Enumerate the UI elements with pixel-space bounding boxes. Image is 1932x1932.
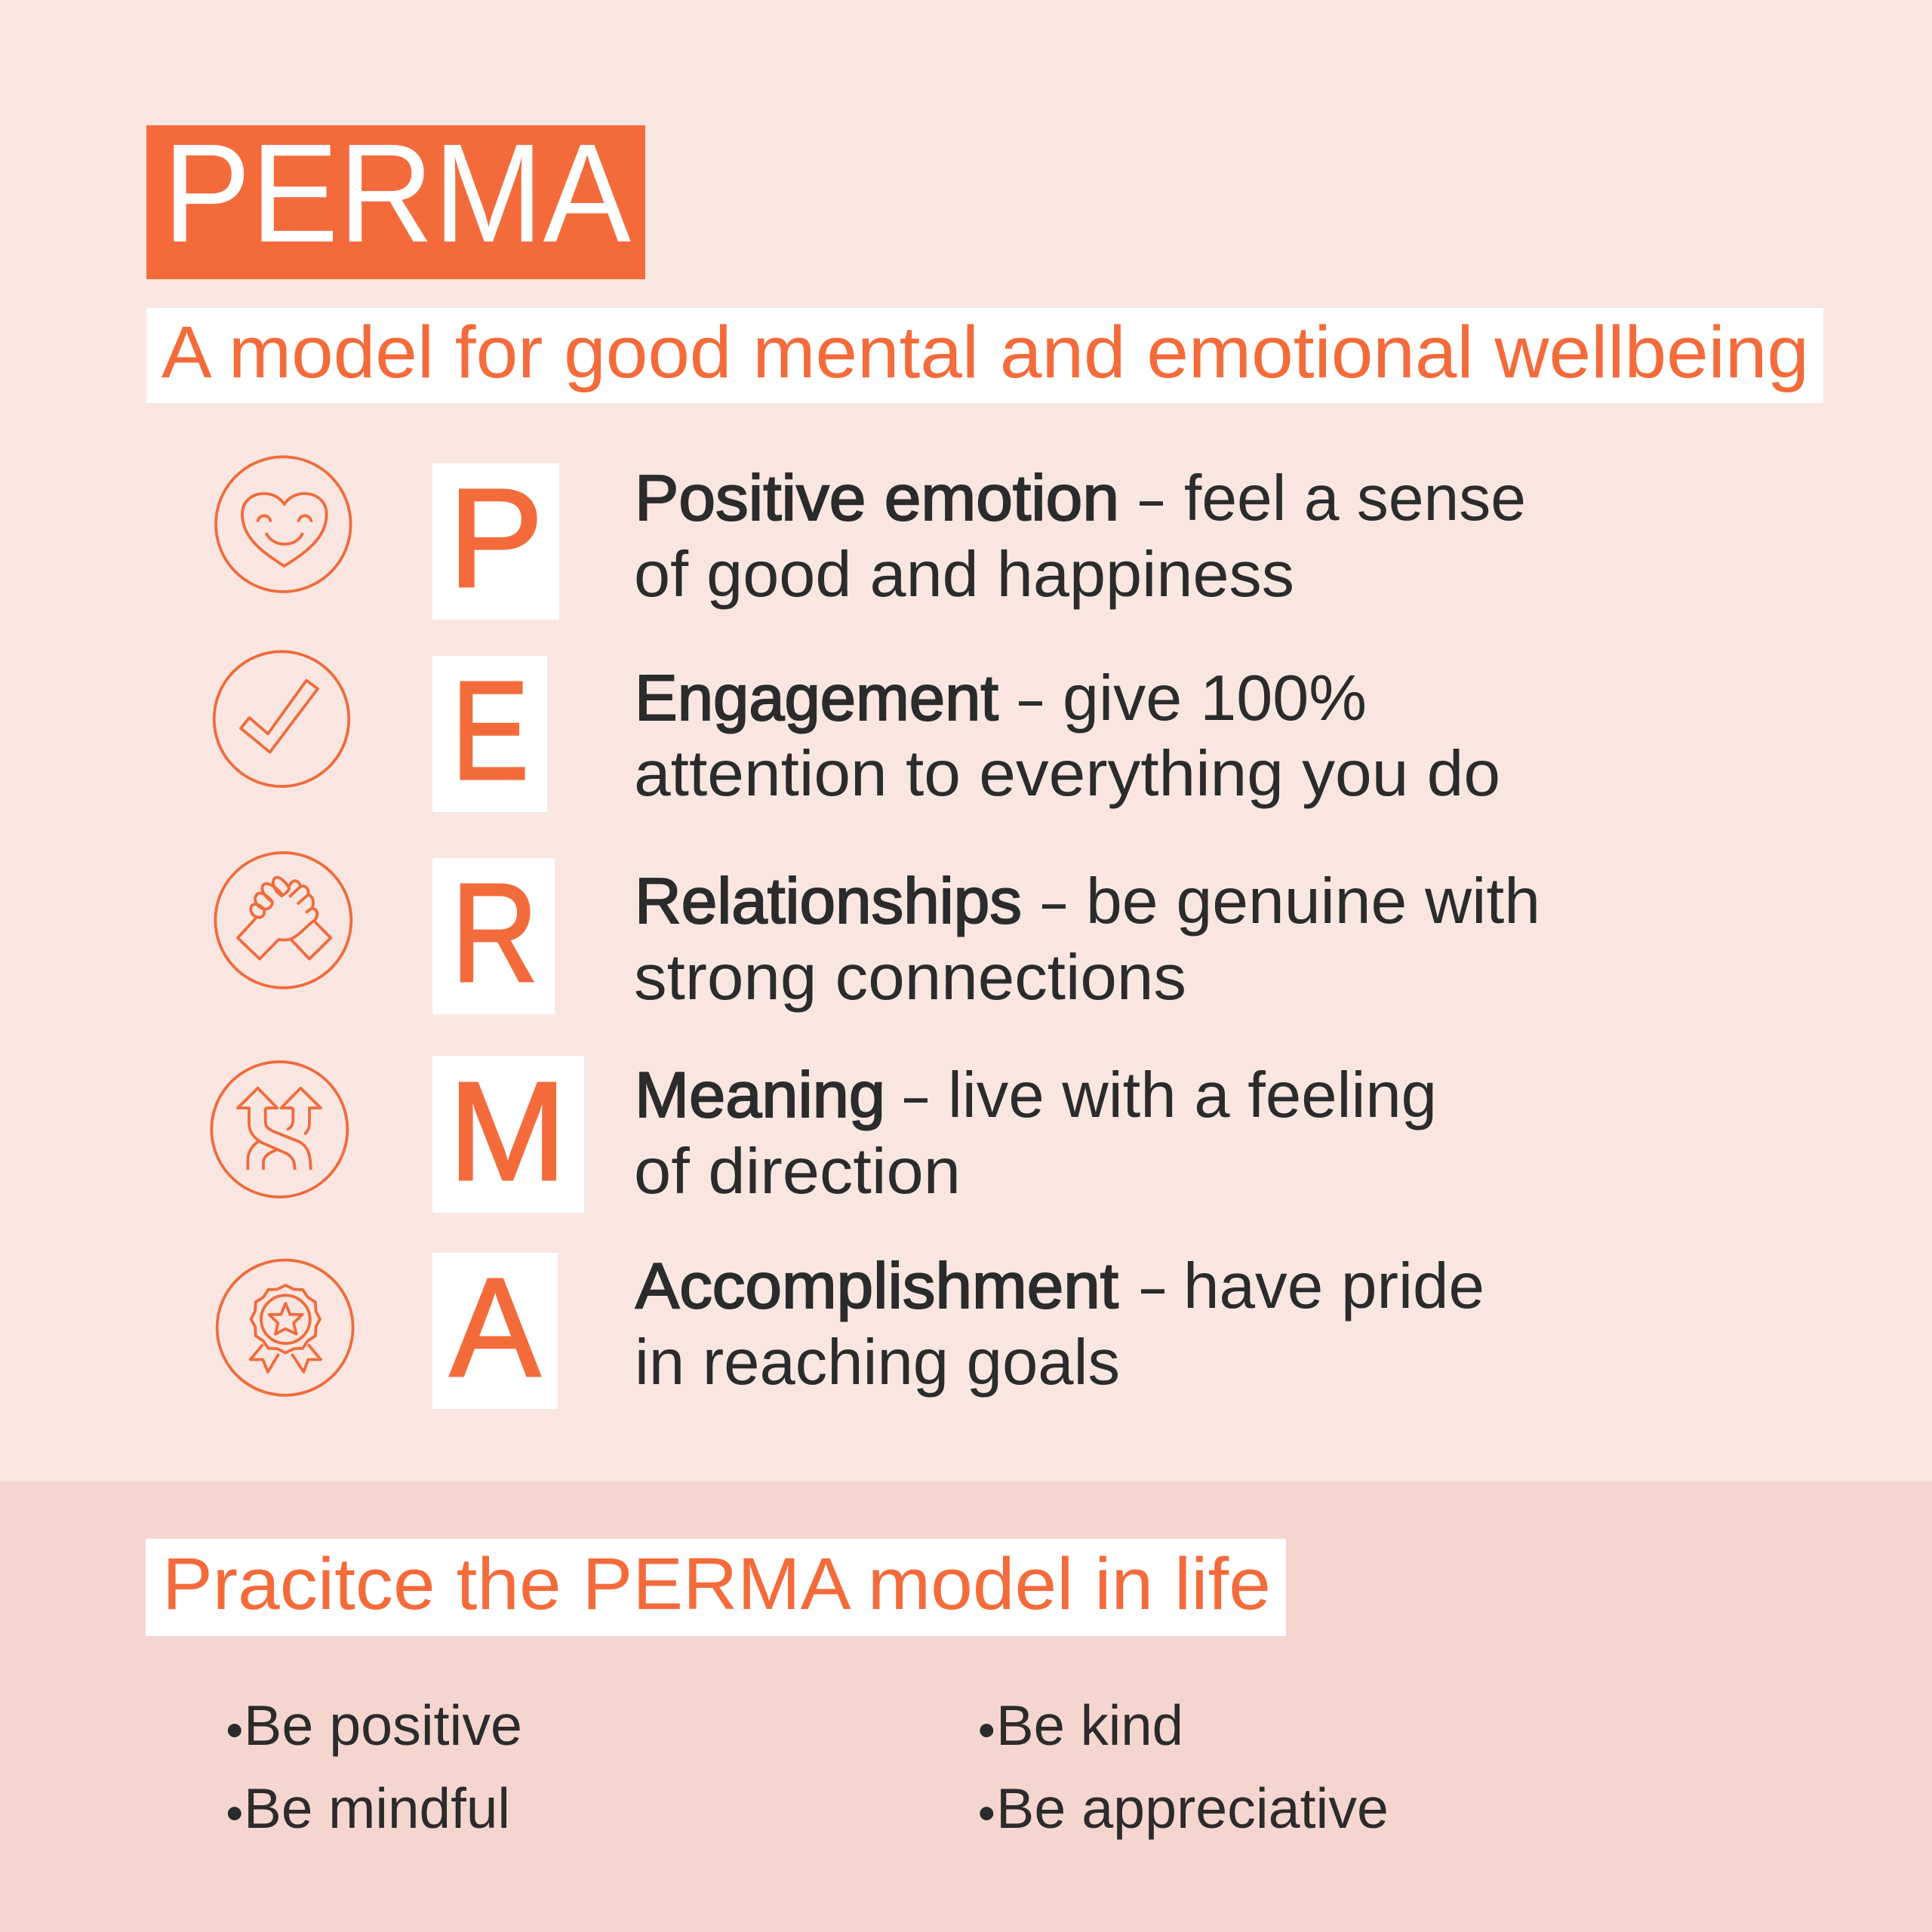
subtitle: A model for good mental and emotional wellbeing — [162, 311, 1809, 393]
text: relationships: be genuine with — [1086, 866, 1540, 937]
text: meaning — [634, 1060, 1437, 1208]
text: meaning: Meaning — [635, 1060, 885, 1131]
background: bottom section — [0, 1481, 1932, 1932]
list: left column: • — [226, 1785, 243, 1841]
list: left column: Be mindful — [244, 1777, 510, 1840]
text: relationships: – — [1042, 866, 1066, 937]
list: right column: Be kind — [996, 1694, 1183, 1757]
list: right column: • — [978, 1785, 995, 1841]
list: right column — [978, 1694, 1389, 1841]
text: positive emotion: feel a sense — [1184, 463, 1526, 534]
list: left column: • — [226, 1702, 243, 1758]
title: PERMA: PERMA — [163, 115, 631, 272]
text: meaning: of direction — [634, 1136, 961, 1208]
icon: clasped hands — [215, 853, 351, 988]
text: accomplishment: Accomplishment — [635, 1251, 1118, 1322]
row: accomplishment — [217, 1250, 1484, 1409]
letter tile: R: R — [451, 855, 538, 1011]
icon: smiling heart — [216, 457, 351, 592]
letter tile: P: P — [448, 460, 543, 617]
text: relationships: strong connections — [634, 942, 1186, 1014]
text: positive emotion: Positive emotion — [635, 463, 1119, 534]
list: right column: • — [978, 1702, 995, 1758]
text: positive emotion: of good and happiness — [634, 539, 1294, 611]
row: positive emotion — [216, 457, 1526, 620]
text: engagement: Engagement — [635, 663, 998, 734]
letter tile: M: M — [448, 1054, 567, 1210]
text: meaning: – — [904, 1060, 928, 1131]
text: positive emotion: – — [1140, 463, 1163, 534]
background: top section — [0, 0, 1932, 1481]
text: engagement: give 100% — [1063, 663, 1367, 734]
text: accomplishment: have pride — [1183, 1251, 1484, 1322]
text: positive emotion — [634, 463, 1526, 611]
text: relationships — [634, 866, 1540, 1014]
row: meaning — [211, 1054, 1437, 1213]
list: left column: Be positive — [244, 1694, 522, 1757]
text: relationships: Relationships — [635, 866, 1022, 937]
heading: practice: Pracitce the PERMA model in life — [162, 1543, 1271, 1625]
icon: check mark — [214, 651, 349, 786]
text: engagement: attention to everything you do — [634, 738, 1500, 810]
icon: award badge — [217, 1260, 353, 1395]
text: accomplishment: in reaching goals — [635, 1327, 1120, 1398]
text: accomplishment — [635, 1251, 1484, 1398]
icon: crossing arrows — [211, 1062, 347, 1197]
row: relationships — [215, 853, 1540, 1014]
letter tile: E: E — [451, 653, 529, 809]
text: engagement: – — [1019, 663, 1042, 734]
text: accomplishment: – — [1141, 1251, 1164, 1322]
letter tile: A: A — [450, 1250, 540, 1406]
text: meaning: live with a feeling — [948, 1060, 1437, 1131]
text: engagement — [634, 663, 1500, 810]
row: engagement — [214, 651, 1500, 812]
list: left column — [226, 1694, 522, 1841]
list: right column: Be appreciative — [996, 1777, 1389, 1840]
